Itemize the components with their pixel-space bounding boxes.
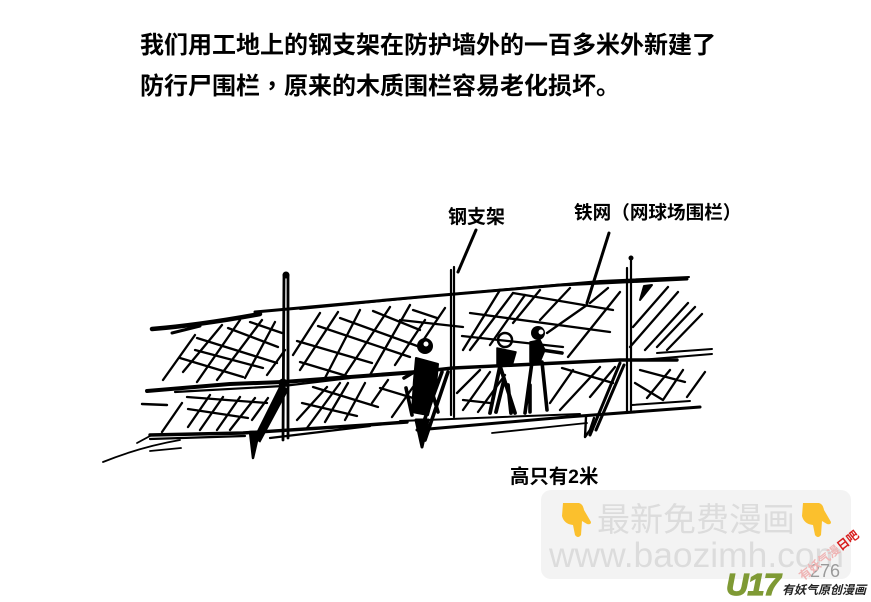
page number: 276 [810,561,840,581]
logo: u17: U17 [726,567,780,602]
fence post right [585,256,634,437]
top rail [152,277,689,333]
figure: person right [525,326,562,413]
logo caption: 有妖气原创漫画 [782,583,866,597]
label: height only 2 meters: 高只有2米 [510,466,598,488]
fence post left [250,272,290,458]
arrow: to wire mesh [587,233,609,303]
label: steel bracket: 钢支架 [448,207,505,228]
watermark url: www.baozimh.com [549,535,844,575]
icon: pointing hand left [562,503,591,537]
bottom rail [103,401,700,462]
heading text [140,32,716,101]
label: wire mesh: 铁网（网球场围栏） [574,198,741,225]
arrow: to steel bracket [458,230,476,272]
figure: person middle [490,333,516,413]
watermark title: 最新免费漫画 [597,501,795,538]
heading text: 防行尸围栏，原来的木质围栏容易老化损坏。 [140,66,620,101]
middle rail [142,349,712,405]
watermark panel [541,490,851,579]
fence post middle [416,267,454,447]
figure: person left [404,338,438,415]
fence mesh [162,287,705,432]
red watermark: 有妖气漫日吧 [796,528,862,583]
heading text: 我们用工地上的钢支架在防护墙外的一百多米外新建了 [140,32,716,59]
icon: pointing hand right [802,503,831,537]
